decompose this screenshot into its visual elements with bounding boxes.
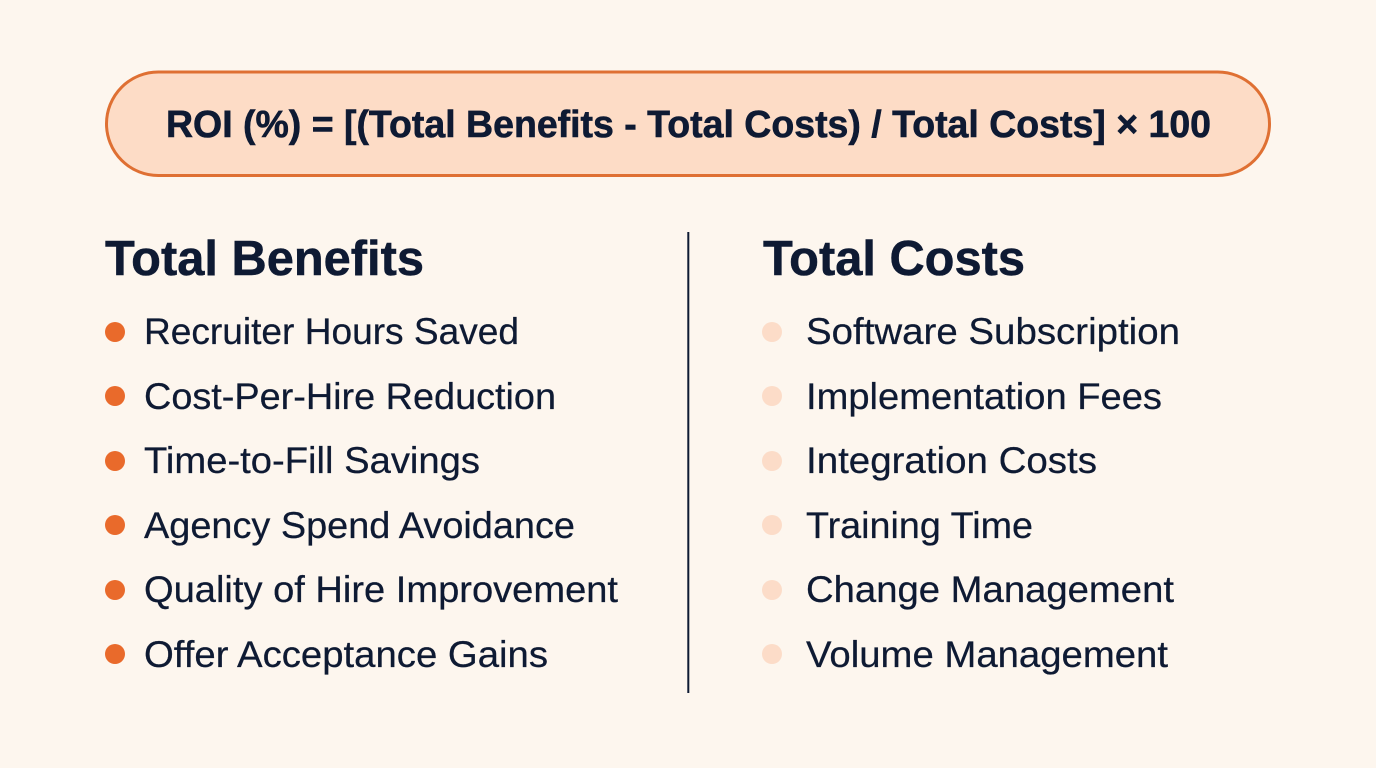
cost: implementation fees: Implementation Fees [806, 376, 1162, 417]
heading: total costs: Total Costs [763, 232, 1025, 286]
benefit: cost-per-hire reduction: Cost-Per-Hire Reduction [144, 376, 556, 417]
cost: integration costs: Integration Costs [806, 440, 1097, 481]
cost: training time: Training Time [806, 505, 1033, 546]
cost: change management: Change Management [806, 569, 1175, 610]
benefit: quality of hire improvement: Quality of Hire Improvement [144, 569, 619, 610]
benefit: agency spend avoidance: Agency Spend Avoidance [144, 505, 575, 546]
benefit: time-to-fill savings: Time-to-Fill Savings [144, 440, 480, 481]
benefit: recruiter hours saved: Recruiter Hours Saved [144, 311, 519, 352]
benefit: offer acceptance gains: Offer Acceptance Gains [144, 634, 548, 675]
panel: total benefits [105, 232, 619, 675]
heading: total benefits: Total Benefits [105, 232, 424, 286]
cost: software subscription: Software Subscription [806, 311, 1180, 352]
formula pill [106, 72, 1270, 176]
cost: volume management: Volume Management [806, 634, 1169, 675]
panel: total costs [762, 232, 1180, 675]
formula pill: ROI (%) = [(Total Benefits - Total Costs) / Total Costs] × 100 [166, 104, 1211, 146]
